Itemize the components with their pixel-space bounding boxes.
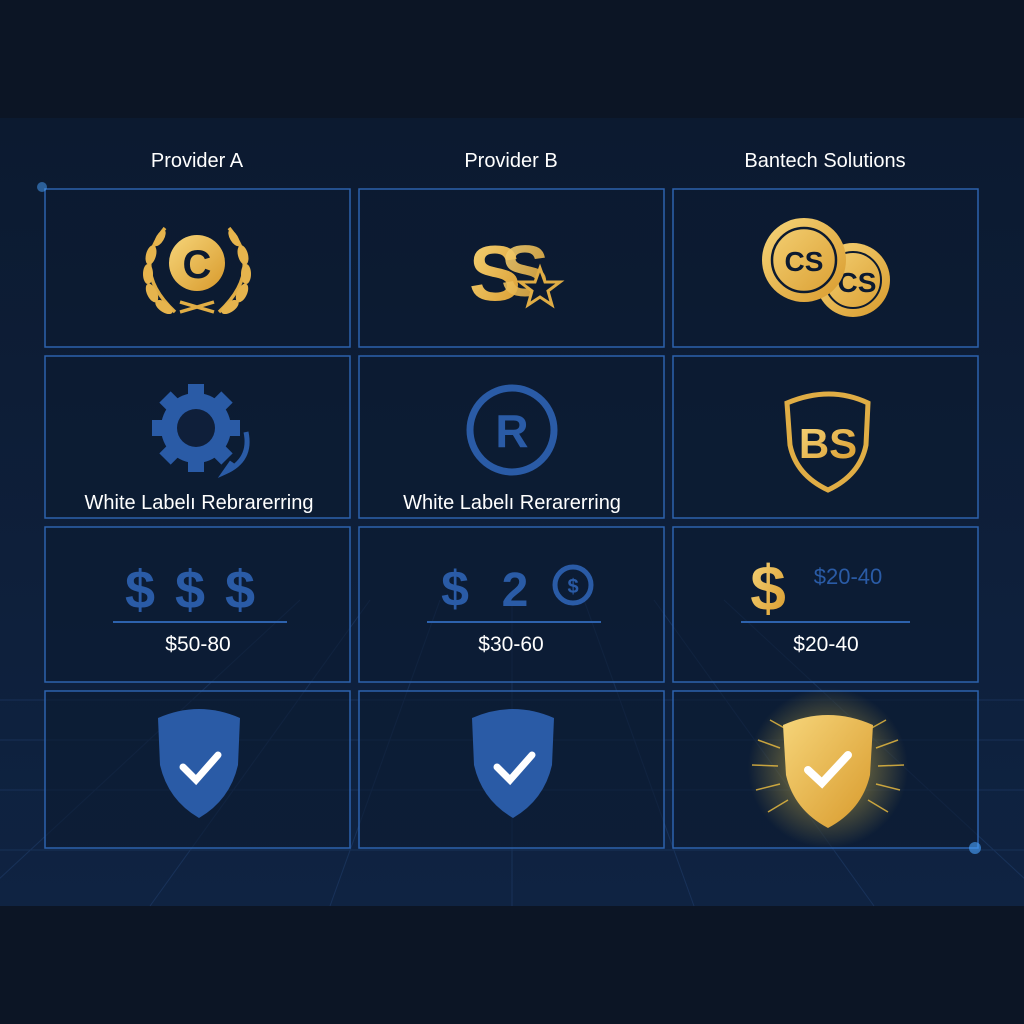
icon: CS coins: CS [838,267,876,298]
icon: gold shield glow [748,688,908,848]
icon: SS star: S [501,232,549,312]
icon: SS star: S [469,229,521,317]
icon: BS shield [787,394,868,490]
header: Bantech Solutions: Bantech Solutions [744,150,906,172]
price Bantech: $20-40 [793,633,859,656]
price A [113,560,287,656]
icon: laurel C: C [183,243,211,287]
price A: $50-80 [165,633,231,656]
price Bantech: $ [750,552,786,624]
header: Provider A: Provider A [151,150,244,172]
price B: 2 [502,564,528,617]
icon: CS coins [762,218,890,317]
icon: laurel C [143,228,251,317]
price Bantech [741,552,910,656]
icon: shield A [158,709,240,818]
price B: $30-60 [478,633,544,656]
grid of cells [45,189,978,848]
icon: shield B [472,709,554,818]
header: Provider B: Provider B [464,150,558,172]
price B: $ [441,561,469,617]
icon: BS shield: BS [799,420,857,467]
text: white label B: White Labelı Rerarerring [403,492,621,514]
icon: registered: R [495,405,529,457]
price A: $$$ [125,560,275,620]
icon: registered [470,388,554,472]
price Bantech: $20-40 [814,564,882,589]
icon: SS star [469,229,560,317]
icon: gear [152,384,247,472]
price B: $ [567,576,579,598]
price B [427,561,601,656]
icon: CS coins: CS [785,246,823,277]
text: white label A: White Labelı Rebrarerring [84,492,314,514]
